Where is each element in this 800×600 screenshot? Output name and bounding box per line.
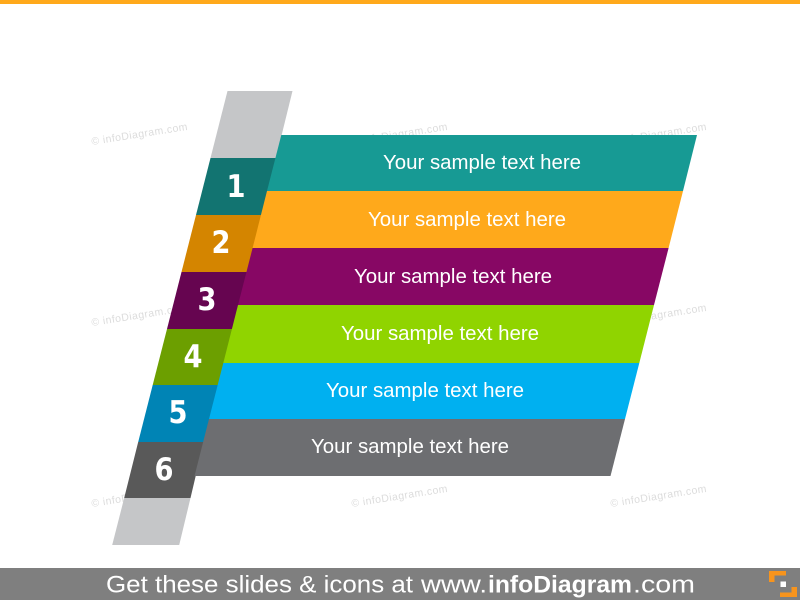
watermarks: © infoDiagram.com bbox=[91, 483, 189, 510]
footer text: .com bbox=[633, 572, 695, 598]
bar 2 bbox=[253, 191, 683, 248]
bar 2 label: Your sample text here bbox=[368, 209, 566, 231]
number 4: 4 bbox=[184, 339, 202, 375]
step 5 bbox=[138, 363, 639, 442]
number block 1 bbox=[196, 158, 276, 215]
top accent bar bbox=[0, 0, 800, 4]
watermarks bbox=[91, 121, 708, 510]
footer text: infoDiagram bbox=[488, 572, 632, 598]
step 2 bbox=[182, 191, 683, 272]
footer text: Get these slides & icons at bbox=[106, 572, 413, 598]
number 2: 2 bbox=[212, 225, 230, 261]
number block 3 bbox=[167, 272, 247, 329]
watermarks: © infoDiagram.com bbox=[351, 483, 449, 510]
bar 1 bbox=[267, 135, 697, 191]
watermarks: © infoDiagram.com bbox=[91, 121, 189, 148]
number block 4 bbox=[153, 329, 232, 385]
watermarks: © infoDiagram.com bbox=[351, 302, 449, 329]
bar 6 label: Your sample text here bbox=[311, 436, 509, 458]
bar 3 label: Your sample text here bbox=[354, 266, 552, 288]
step 1 bbox=[196, 135, 697, 215]
bar 4 label: Your sample text here bbox=[341, 323, 539, 345]
gray column top cap bbox=[210, 91, 292, 158]
step 6 bbox=[124, 419, 625, 498]
number 1: 1 bbox=[226, 169, 246, 205]
bar 5 label: Your sample text here bbox=[326, 380, 524, 402]
bar 6 bbox=[194, 419, 625, 476]
watermarks: © infoDiagram.com bbox=[610, 483, 708, 510]
watermarks: © infoDiagram.com bbox=[610, 121, 708, 148]
bar 3 bbox=[238, 248, 669, 305]
bar 5 bbox=[209, 363, 639, 419]
watermarks: © infoDiagram.com bbox=[351, 121, 449, 148]
footer band bbox=[0, 568, 800, 600]
number block 6 bbox=[124, 442, 204, 498]
number block 2 bbox=[182, 215, 262, 272]
number 6: 6 bbox=[154, 452, 174, 488]
watermarks: © infoDiagram.com bbox=[610, 302, 708, 329]
watermarks: © infoDiagram.com bbox=[91, 302, 189, 329]
step 4 bbox=[153, 305, 654, 385]
step 3 bbox=[167, 248, 669, 329]
footer text bbox=[106, 572, 695, 598]
number block 5 bbox=[138, 385, 218, 442]
number 5: 5 bbox=[168, 395, 188, 431]
number 3: 3 bbox=[198, 282, 216, 318]
bar 1 label: Your sample text here bbox=[383, 152, 581, 174]
footer text: www. bbox=[420, 572, 487, 598]
gray column bottom cap bbox=[112, 498, 190, 545]
bar 4 bbox=[223, 305, 654, 363]
icon: infoDiagram logo bbox=[769, 571, 797, 597]
